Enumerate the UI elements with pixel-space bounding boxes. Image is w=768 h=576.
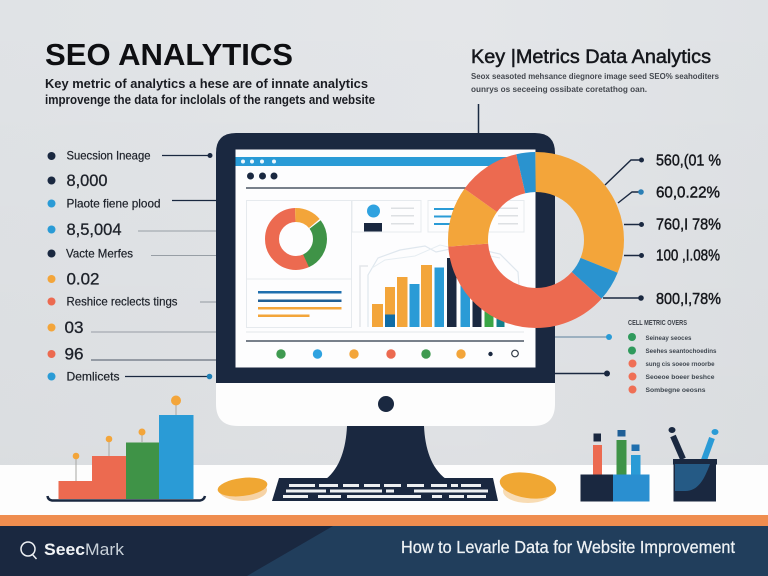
list item: 0.02 (48, 270, 100, 288)
list item: 8,000 (48, 172, 108, 190)
footer tagline: How to Levarle Data for Website Improvement (401, 537, 735, 557)
percentage values: 560,(01 % (656, 152, 721, 170)
connector: heading to monitor (478, 104, 480, 134)
panel: list card (428, 200, 524, 232)
panel: small donut (246, 200, 352, 279)
title: SEO ANALYTICS (45, 37, 293, 72)
legend: Seineay seoces (646, 335, 692, 342)
key metrics description (471, 71, 719, 94)
list item: session: Suecsion Ineage (66, 148, 151, 162)
icon: magnifier (21, 542, 36, 559)
metric list (48, 148, 178, 384)
percentage values: 100 ,I.08% (656, 248, 720, 264)
percentage values: 800,I,78% (656, 291, 721, 308)
legend: CELL METRIC OVERS (628, 320, 687, 327)
pen cup (668, 427, 718, 502)
connectors: left list (91, 153, 216, 379)
legend: Seoeoe boeer beshce (646, 374, 715, 381)
list item: 96 (48, 346, 84, 364)
legend: sung cis soeoe rnoorbe (646, 361, 715, 368)
bowl right (498, 469, 558, 503)
legend: Seehes seantochoedins (646, 348, 717, 355)
panel: profile card (352, 200, 421, 232)
percentage values (656, 152, 721, 308)
list item: 96: 96 (64, 346, 84, 364)
camera (378, 396, 394, 412)
bar chart (360, 245, 522, 327)
desk bar chart (48, 396, 205, 500)
bowl left (217, 475, 268, 501)
monitor stand (326, 426, 446, 479)
list item: 03 (48, 319, 84, 337)
intro text: improvenge the data for inclolals of the rangets and website (45, 92, 375, 107)
legend: Sombegne oeosns (646, 387, 706, 394)
logo: SeecMark (44, 540, 125, 559)
intro text (45, 76, 375, 107)
browser bar (236, 157, 524, 166)
list item: place: Plaote fiene plood (66, 196, 160, 210)
panel: text lines (246, 279, 352, 328)
key metrics description: Seox seasoted mehsance diegnore image seed SEO% seahoditers (471, 71, 719, 81)
list item: 8,5,004: 8,5,004 (66, 221, 122, 239)
percentage values: 60,0.22% (656, 184, 720, 202)
list item: 8,000: 8,000 (66, 172, 108, 190)
legend (628, 320, 717, 394)
list item: vacte: Vacte Merfes (66, 246, 133, 260)
large donut chart (468, 172, 604, 308)
window dots (247, 172, 278, 180)
connectors: right values (555, 158, 644, 376)
monitor frame (216, 133, 555, 383)
monitor chin (216, 370, 555, 426)
tube holder (580, 430, 650, 502)
list item: demlicets: Demlicets (66, 370, 120, 384)
list item: 03: 03 (64, 319, 84, 337)
percentage values: 760,I 78% (656, 216, 721, 234)
intro text: Key metric of analytics a hese are of innate analytics (45, 76, 368, 91)
key metrics description: ounrys os seceeing ossibate coretathog oan. (471, 84, 647, 94)
list item: reshice: Reshice reclects tings (66, 294, 178, 308)
keyboard (272, 478, 498, 501)
screen (236, 150, 536, 368)
footer band (0, 515, 768, 576)
legend dots (276, 349, 518, 359)
heading: key metrics: Key |Metrics Data Analytics (471, 47, 711, 68)
list item: 0.02: 0.02 (66, 270, 100, 288)
monitor (216, 133, 555, 479)
